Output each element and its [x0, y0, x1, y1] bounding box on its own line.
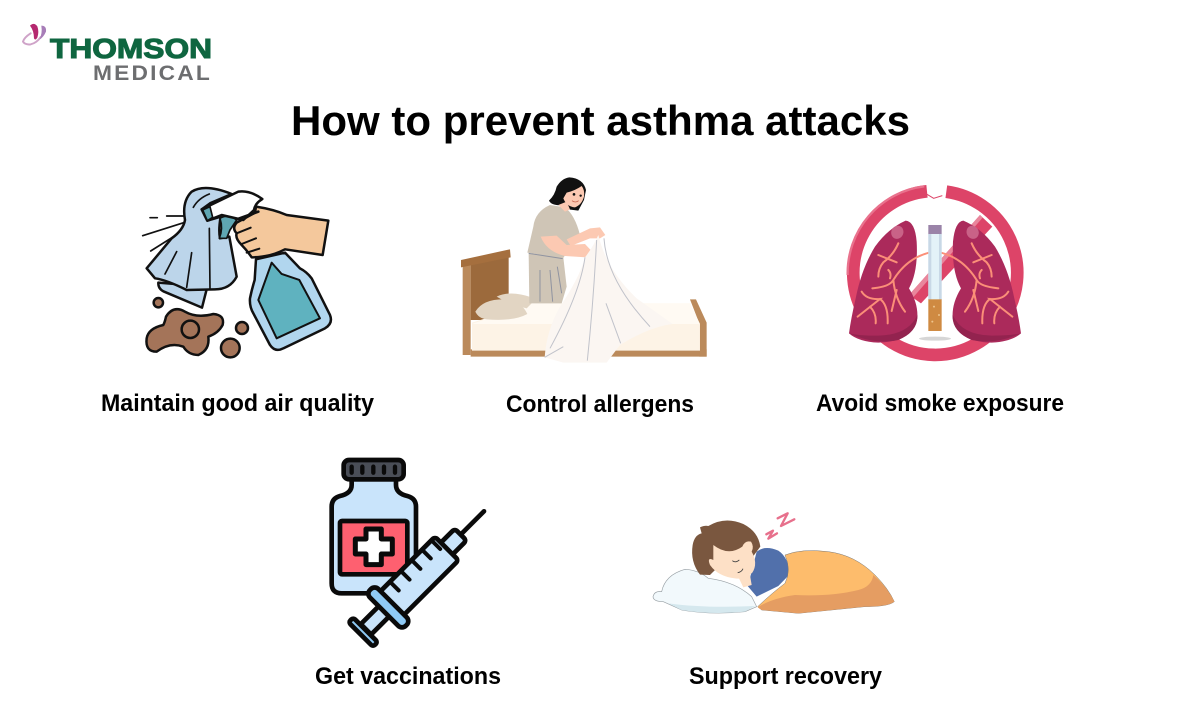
bed frame — [463, 265, 471, 355]
face — [563, 186, 584, 207]
label: Get vaccinations — [315, 663, 501, 690]
pillow — [653, 569, 757, 613]
hand — [234, 207, 328, 257]
mattress — [472, 303, 700, 351]
woman skirt — [529, 253, 567, 303]
logo word: THOMSON: THOMSON — [50, 33, 212, 64]
stain — [146, 309, 223, 355]
pillows — [497, 293, 533, 308]
sleep letters — [766, 513, 794, 539]
panel: control allergens — [461, 177, 707, 418]
panel: get vaccinations — [315, 460, 502, 690]
panel: support recovery — [653, 513, 894, 690]
bronchi — [858, 243, 1012, 323]
panel: maintain good air quality — [101, 188, 375, 417]
panel: avoid smoke exposure — [816, 186, 1064, 417]
label: Maintain good air quality — [101, 390, 375, 417]
label: Support recovery — [689, 663, 883, 690]
label: Control allergens — [506, 391, 694, 418]
teal trigger — [219, 216, 237, 238]
prohibition ring — [853, 191, 1017, 355]
body — [748, 548, 790, 597]
woman shirt — [527, 205, 580, 259]
bottle — [250, 253, 331, 350]
spray head — [202, 191, 262, 221]
syringe — [343, 494, 502, 653]
title: How to prevent asthma attacks — [291, 97, 910, 144]
vial label — [340, 521, 407, 574]
icon: lungs with cigarette and prohibition sign — [848, 186, 1021, 355]
icon: butterfly heart mark — [23, 24, 46, 44]
right lung — [953, 221, 1021, 343]
vial — [332, 479, 416, 593]
spray lines — [143, 216, 192, 251]
arms — [541, 236, 591, 257]
lower cloth — [158, 283, 207, 308]
left lung — [849, 221, 917, 343]
cigarette — [928, 225, 942, 234]
icon: woman making bed — [461, 177, 707, 363]
face — [709, 541, 755, 579]
icon: vaccine vial and syringe — [332, 460, 502, 653]
logo word: MEDICAL: MEDICAL — [93, 62, 212, 85]
icon: spray bottle, hand and cloth — [143, 188, 331, 357]
hand — [739, 575, 752, 587]
icon: child sleeping under a blanket — [653, 513, 894, 613]
cloth — [147, 188, 237, 290]
logo: Thomson Medical — [23, 24, 212, 85]
label: Avoid smoke exposure — [816, 390, 1064, 417]
blanket — [758, 551, 894, 613]
sheet — [545, 235, 673, 363]
hair — [549, 177, 586, 211]
hair — [692, 520, 760, 575]
